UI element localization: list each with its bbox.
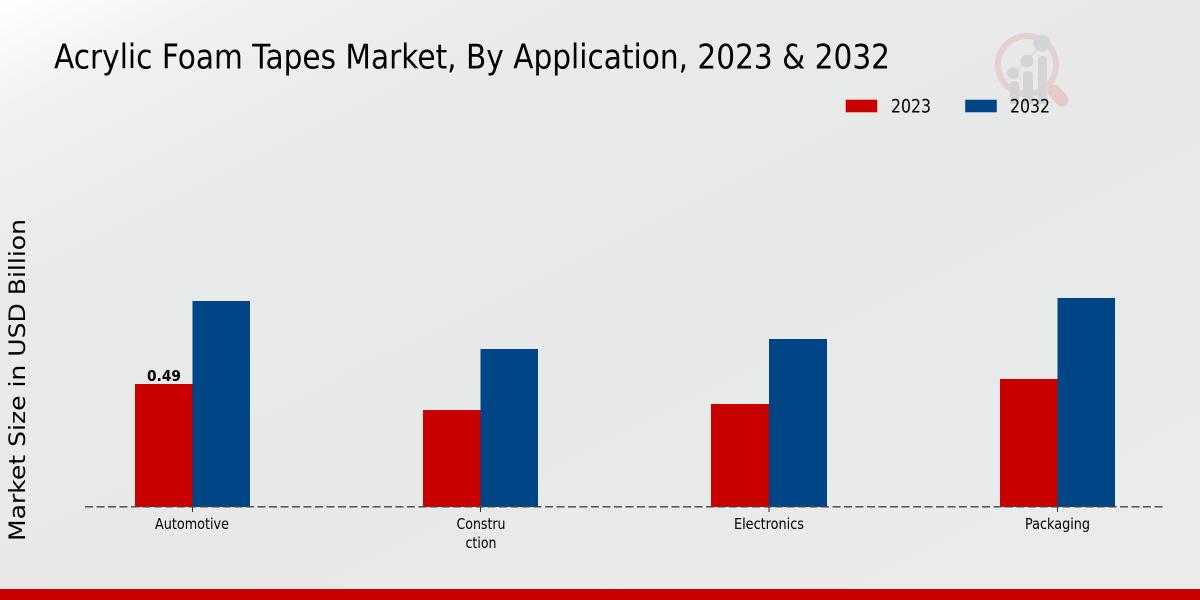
- bars: Construction: [423, 349, 538, 507]
- label: Construction: [456, 515, 506, 552]
- legend: [846, 96, 1050, 118]
- legend: 2032: 2032: [1010, 96, 1050, 118]
- bar chart: [85, 298, 1165, 552]
- label: Electronics: Electronics: [734, 515, 804, 533]
- label: Construction: ction: [466, 534, 496, 552]
- label: Automotive: Automotive: [155, 515, 229, 533]
- bars: Automotive: [135, 301, 250, 507]
- title: Acrylic Foam Tapes Market, By Application, 2023 & 2032: [54, 38, 890, 76]
- legend: 2032: [965, 96, 1050, 118]
- y axis label: Market Size in USD Billion: [5, 219, 31, 541]
- bars: Electronics: [711, 339, 827, 507]
- icon: watermark logo: [998, 34, 1062, 104]
- x labels: [155, 515, 1090, 552]
- label: Construction: Constru: [456, 515, 506, 533]
- bars: Packaging: [1000, 298, 1115, 507]
- legend: 2023: [846, 96, 931, 118]
- label: Packaging: Packaging: [1025, 515, 1090, 533]
- value label: 0.49: 0.49: [147, 367, 181, 385]
- footer bar: [0, 589, 1200, 600]
- x axis baseline: [85, 506, 1165, 508]
- legend: 2023: 2023: [891, 96, 931, 118]
